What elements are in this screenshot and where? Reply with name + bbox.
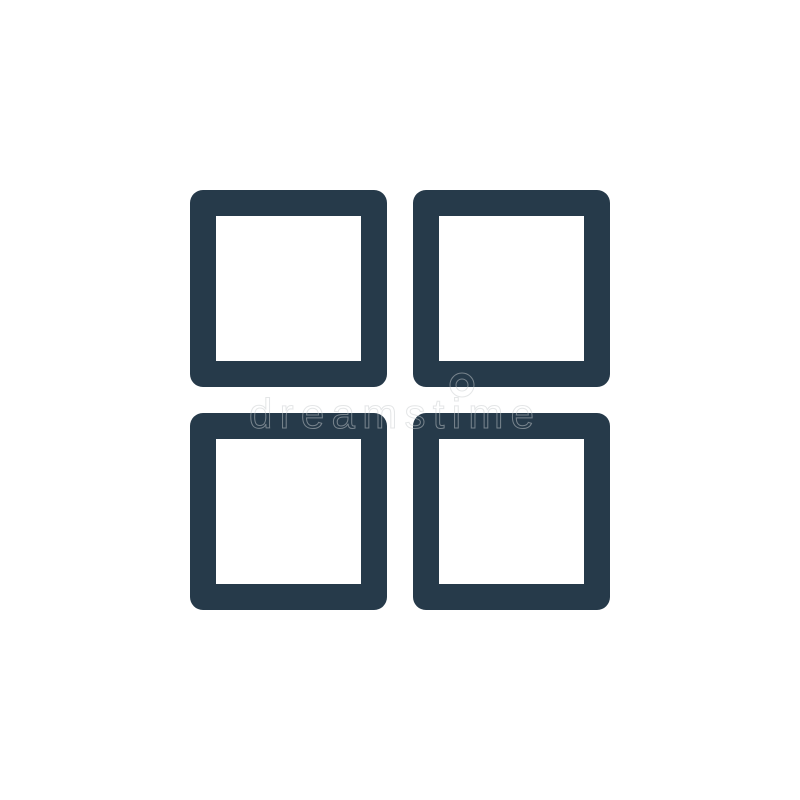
grid square: bottom right [426, 426, 597, 597]
icon: four-square grid [203, 203, 597, 597]
watermark [249, 373, 534, 437]
grid square: top right [426, 203, 597, 374]
grid square: bottom left [203, 426, 374, 597]
grid square: top left [203, 203, 374, 374]
watermark: wordmark: dreamstime [249, 390, 534, 437]
watermark: spiral logo [450, 373, 474, 397]
